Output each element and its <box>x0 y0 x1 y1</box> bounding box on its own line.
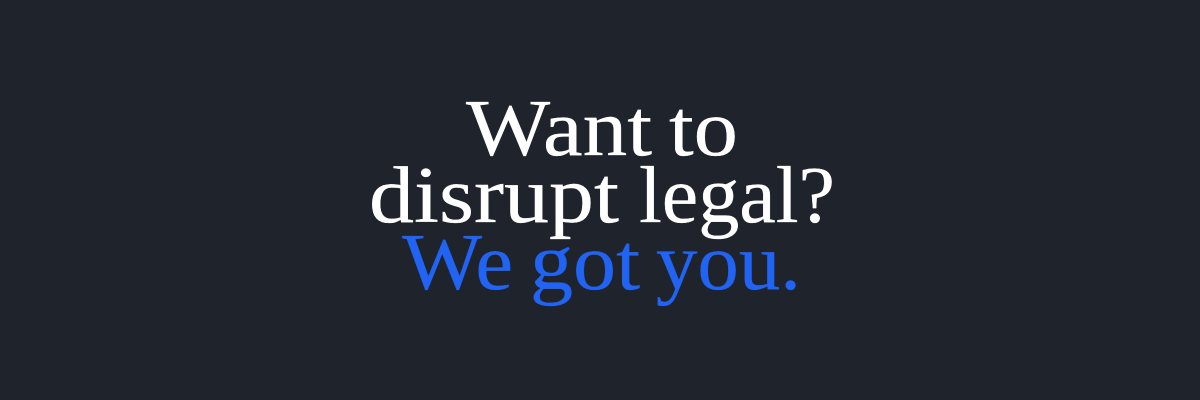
heading line: We got you.: We <box>402 217 513 307</box>
heading line: Want to: Want <box>466 83 653 173</box>
heading line: disrupt legal?: legal? <box>639 150 835 240</box>
heading line: disrupt legal? <box>369 150 835 240</box>
heading line: We got you.: you. <box>656 217 801 307</box>
heading line: Want to <box>466 83 738 173</box>
heading line: disrupt legal?: disrupt <box>369 150 620 240</box>
heading line: Want to: to <box>669 83 738 173</box>
heading line: We got you.: got <box>530 217 641 307</box>
heading line: We got you. <box>402 217 801 307</box>
